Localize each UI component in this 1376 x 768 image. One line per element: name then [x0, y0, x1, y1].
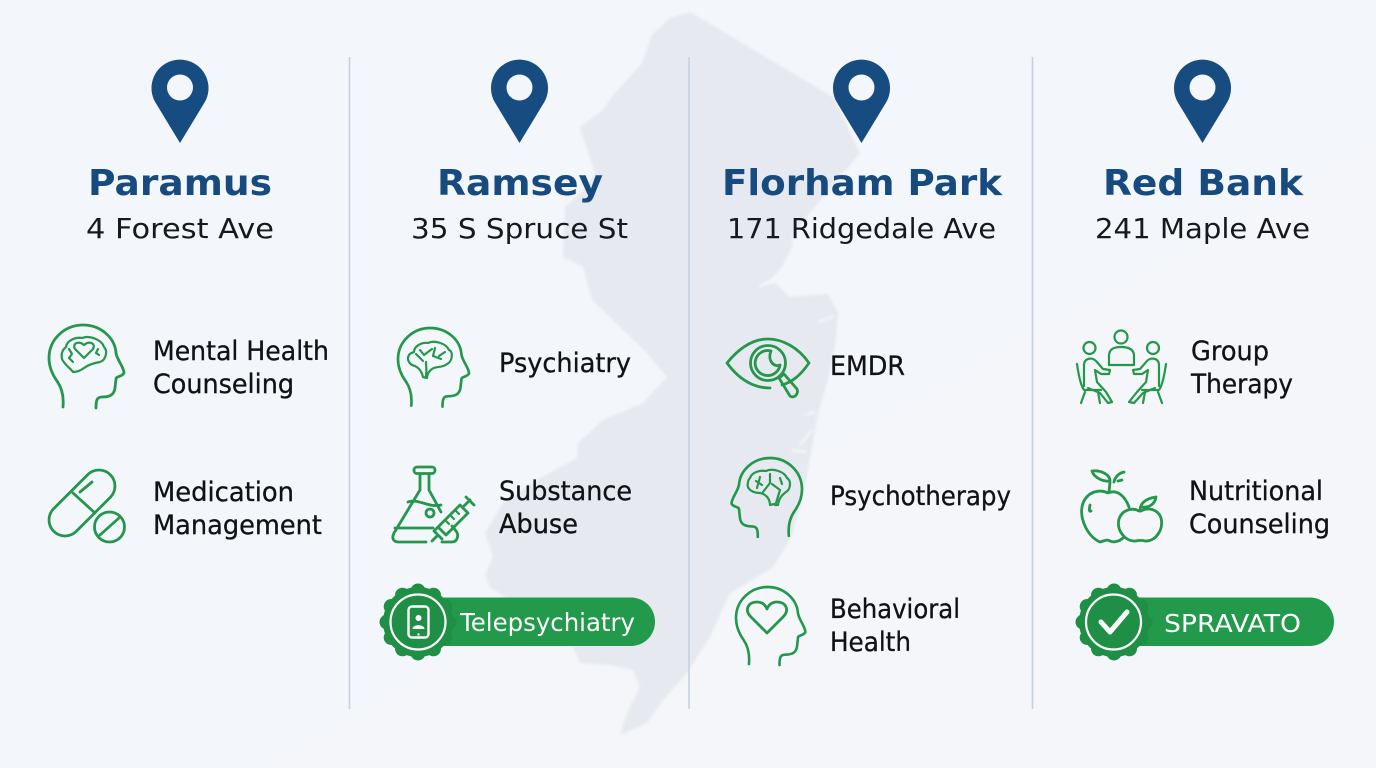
icon: eye with magnifier — [727, 339, 809, 397]
icon: head with heart — [736, 587, 805, 665]
label: Nutritional Counseling: Counseling — [1189, 509, 1330, 540]
label: Nutritional Counseling: Nutritional — [1189, 476, 1323, 507]
pill background — [1100, 598, 1334, 646]
heading: Red Bank: Red Bank — [1103, 163, 1304, 204]
address: 35 S Spruce St: 35 S Spruce St — [411, 213, 628, 245]
label: Mental Health Counseling: Mental Health — [153, 336, 329, 367]
icon: location pin — [1174, 60, 1231, 143]
icon: head with brain, facing left — [732, 458, 802, 537]
map: New Jersey silhouette — [485, 12, 860, 735]
label: Group Therapy: Therapy — [1190, 369, 1293, 400]
scalloped seal — [380, 584, 456, 660]
label: Mental Health Counseling: Counseling — [153, 369, 294, 400]
label: Mental Health Counseling — [153, 336, 329, 400]
panel: Paramus — [42, 60, 329, 543]
label: Psychotherapy: Psychotherapy — [830, 481, 1011, 512]
label: Substance Abuse: Abuse — [499, 509, 578, 540]
label: EMDR: EMDR — [830, 351, 905, 382]
label: Nutritional Counseling — [1189, 476, 1330, 540]
label: Psychiatry: Psychiatry — [499, 348, 631, 379]
label: Group Therapy: Group — [1191, 336, 1269, 367]
icon: head with heart brain — [49, 325, 124, 408]
icon: apples — [1082, 471, 1162, 542]
icon: group therapy — [1077, 330, 1166, 403]
heading: Paramus: Paramus — [88, 163, 272, 204]
label: SPRAVATO — [1164, 609, 1301, 638]
label: Medication Management — [153, 477, 322, 541]
pill background — [405, 598, 655, 646]
icon: location pin — [152, 60, 209, 143]
label: Medication Management: Management — [153, 510, 322, 541]
label: Substance Abuse: Substance — [499, 476, 632, 507]
address: 241 Maple Ave: 241 Maple Ave — [1095, 213, 1310, 245]
icon: head with brain — [398, 328, 469, 407]
label: Substance Abuse — [499, 476, 632, 540]
badge: Telepsychiatry — [380, 584, 655, 660]
panel: Florham Park — [722, 60, 1011, 665]
address: 4 Forest Ave: 4 Forest Ave — [86, 213, 274, 245]
badge: SPRAVATO — [1076, 584, 1334, 660]
icon: location pin — [833, 60, 890, 143]
icon: capsule and tablet — [42, 463, 124, 543]
scalloped seal — [1076, 584, 1152, 660]
dividers — [350, 57, 1032, 709]
label: Behavioral Health: Health — [830, 627, 911, 658]
icon: check mark — [1101, 612, 1127, 632]
label: Medication Management: Medication — [153, 477, 294, 508]
label: Behavioral Health: Behavioral — [830, 594, 960, 625]
panel: Red Bank — [1076, 60, 1334, 661]
label: Telepsychiatry — [459, 608, 635, 637]
icon: flask and syringe — [393, 467, 474, 542]
icon: phone with person — [408, 606, 428, 638]
panel: Ramsey — [380, 60, 655, 660]
icon: location pin — [491, 60, 548, 143]
label: Behavioral Health — [830, 594, 960, 658]
heading: Ramsey: Ramsey — [437, 163, 603, 204]
label: Group Therapy — [1190, 336, 1293, 400]
heading: Florham Park: Florham Park — [722, 163, 1003, 204]
address: 171 Ridgedale Ave: 171 Ridgedale Ave — [727, 213, 996, 245]
